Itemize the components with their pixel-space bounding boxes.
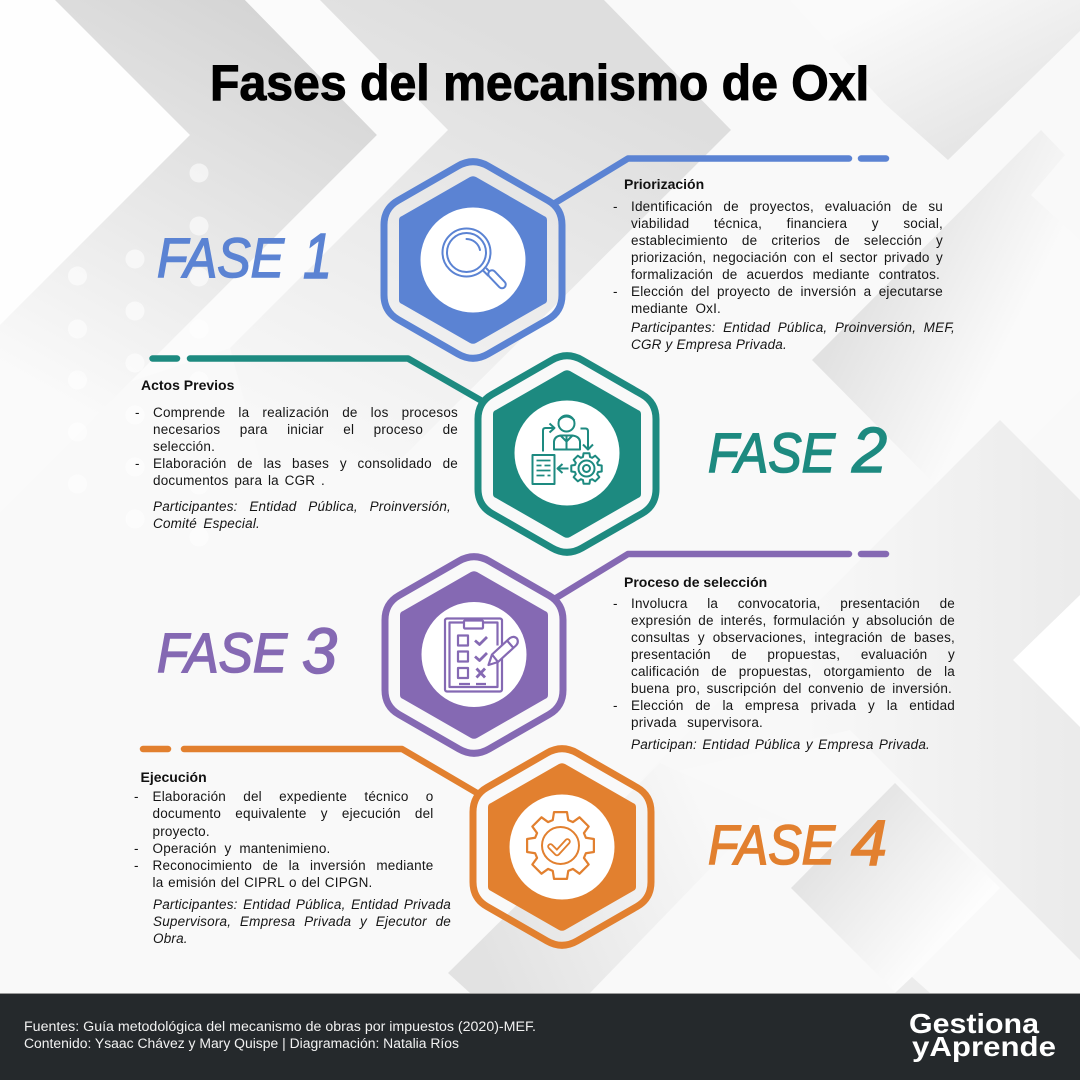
connector line: fase 1 bbox=[554, 155, 890, 204]
connector line: fase 2 bbox=[149, 355, 482, 403]
phase label: FASE 4 bbox=[708, 807, 887, 879]
panel: fase 4 ejecución bbox=[134, 745, 887, 949]
text block: ejecución: Reconocimiento de la inversión mediante bbox=[152, 858, 434, 872]
hexagon badge: fase 3 checklist bbox=[382, 553, 566, 757]
text block: proceso de selección: Proceso de selección bbox=[624, 574, 767, 590]
text block: priorización: formalización de acuerdos mediante contratos. bbox=[631, 267, 940, 282]
text block: ejecución: Elaboración del expediente técnico o bbox=[152, 789, 434, 804]
text block: actos previos: Elaboración de las bases y consolidado de bbox=[153, 456, 458, 471]
footer credits: Fuentes: Guía metodológica del mecanismo de obras por impuestos (2020)-MEF. bbox=[24, 1019, 536, 1034]
text block: proceso de selección: - bbox=[613, 698, 618, 713]
text block: actos previos bbox=[135, 377, 458, 531]
logo: Gestiona y Aprende: yAprende bbox=[912, 1031, 1056, 1062]
text block: proceso de selección: consultas y observaciones, integración de bases, bbox=[631, 630, 955, 645]
text block: ejecución: - bbox=[134, 840, 139, 856]
text block: ejecución: Obra. bbox=[153, 931, 188, 946]
text block: priorización: Identificación de proyectos, evaluación de su bbox=[631, 199, 943, 214]
text block: priorización: establecimiento de criterios de selección y bbox=[631, 233, 943, 248]
phase label: FASE 1: FASE bbox=[157, 226, 285, 289]
text block: priorización: - bbox=[613, 284, 618, 299]
text block: actos previos: documentos para la CGR . bbox=[153, 473, 325, 488]
phase label: FASE 3: FASE bbox=[157, 621, 288, 684]
hexagon badge: fase 1 magnifier bbox=[380, 158, 566, 362]
footer credits bbox=[24, 1019, 536, 1051]
text block: priorización bbox=[613, 176, 955, 352]
text block: ejecución: Operación y mantenimieno. bbox=[152, 840, 330, 856]
footer bar bbox=[0, 993, 1080, 1080]
phase label: FASE 3 bbox=[157, 615, 338, 687]
text block: ejecución: Ejecución bbox=[140, 769, 207, 785]
text block: actos previos: selección. bbox=[153, 439, 215, 454]
text block: priorización: - bbox=[613, 199, 618, 214]
logo: Gestiona y Aprende bbox=[909, 1008, 1056, 1062]
text block: ejecución bbox=[134, 769, 451, 946]
text block: ejecución: documento equivalente y ejecución del bbox=[152, 806, 434, 821]
text block: ejecución: - bbox=[134, 858, 139, 872]
text block: actos previos: necesarios para iniciar el proceso de bbox=[153, 422, 458, 437]
text block: actos previos: Participantes: Entidad Pública, Proinversión, bbox=[153, 499, 451, 514]
text block: ejecución: Participantes: Entidad Pública, Entidad Privada bbox=[153, 897, 451, 912]
text block: proceso de selección: buena pro, suscripción del convenio de inversión. bbox=[631, 681, 952, 696]
text block: ejecución: proyecto. bbox=[152, 824, 210, 838]
phase label: FASE 1: 1 bbox=[303, 220, 332, 292]
text block: proceso de selección: expresión de interés, formulación y absolución de bbox=[631, 613, 955, 628]
icon: clipboard checklist with pencil bbox=[445, 618, 518, 691]
text block: priorización: viabilidad técnica, financiera y social, bbox=[631, 216, 943, 231]
text block: actos previos: - bbox=[135, 405, 140, 420]
phase label: FASE 2: 2 bbox=[851, 414, 887, 486]
text block: actos previos: - bbox=[135, 456, 140, 471]
phase label: FASE 3: 3 bbox=[302, 615, 337, 687]
text block: proceso de selección bbox=[613, 574, 955, 752]
text block: actos previos: Actos Previos bbox=[141, 377, 234, 393]
icon: magnifier bbox=[442, 228, 502, 284]
panel: fase 2 actos previos bbox=[135, 352, 887, 556]
text block: priorización: priorización, negociación con el sector privado y bbox=[631, 250, 943, 265]
text block: proceso de selección: Participan: Entidad Pública y Empresa Privada. bbox=[631, 737, 930, 752]
title: Fases del mecanismo de OxI bbox=[210, 55, 869, 111]
text block: proceso de selección: Elección de la empresa privada y la entidad bbox=[631, 698, 955, 713]
hexagon badge: fase 2 process bbox=[474, 352, 660, 556]
phase label: FASE 2: FASE bbox=[708, 421, 836, 484]
logo: Gestiona y Aprende: Gestiona bbox=[909, 1008, 1039, 1039]
text block: proceso de selección: - bbox=[613, 596, 618, 611]
text block: proceso de selección: privada supervisora. bbox=[631, 715, 763, 730]
phase label: FASE 4: 4 bbox=[851, 807, 887, 879]
footer credits: Contenido: Ysaac Chávez y Mary Quispe | Diagramación: Natalia Ríos bbox=[24, 1036, 459, 1051]
text block: priorización: mediante OxI. bbox=[631, 301, 721, 316]
icon: gear with check bbox=[527, 812, 593, 878]
text block: actos previos: Comprende la realización de los procesos bbox=[153, 405, 458, 420]
text block: priorización: Participantes: Entidad Pública, Proinversión, MEF, bbox=[631, 320, 955, 335]
text block: ejecución: la emisión del CIPRL o del CIPGN. bbox=[152, 874, 372, 890]
connector line: fase 3 bbox=[554, 550, 890, 600]
phase label: FASE 4: FASE bbox=[708, 813, 836, 876]
text block: ejecución: - bbox=[134, 789, 139, 804]
text block: proceso de selección: Involucra la convocatoria, presentación de bbox=[631, 596, 955, 611]
connector line: fase 4 bbox=[140, 746, 478, 795]
text block: proceso de selección: calificación de propuestas, otorgamiento de la bbox=[631, 664, 955, 679]
text block: priorización: Elección del proyecto de inversión a ejecutarse bbox=[631, 284, 943, 299]
text block: priorización: Priorización bbox=[624, 176, 704, 192]
phase label: FASE 2 bbox=[708, 414, 887, 486]
text block: priorización: CGR y Empresa Privada. bbox=[631, 337, 787, 352]
icon: person, document and gear cycle bbox=[532, 415, 601, 484]
panel: fase 3 proceso de selección bbox=[157, 550, 955, 757]
text block: ejecución: Supervisora, Empresa Privada y Ejecutor de bbox=[153, 914, 451, 929]
text block: actos previos: Comité Especial. bbox=[153, 516, 260, 531]
hexagon badge: fase 4 gear check bbox=[470, 745, 654, 949]
text block: proceso de selección: presentación de propuestas, evaluación y bbox=[631, 647, 955, 662]
panel: fase 1 priorización bbox=[157, 155, 955, 362]
